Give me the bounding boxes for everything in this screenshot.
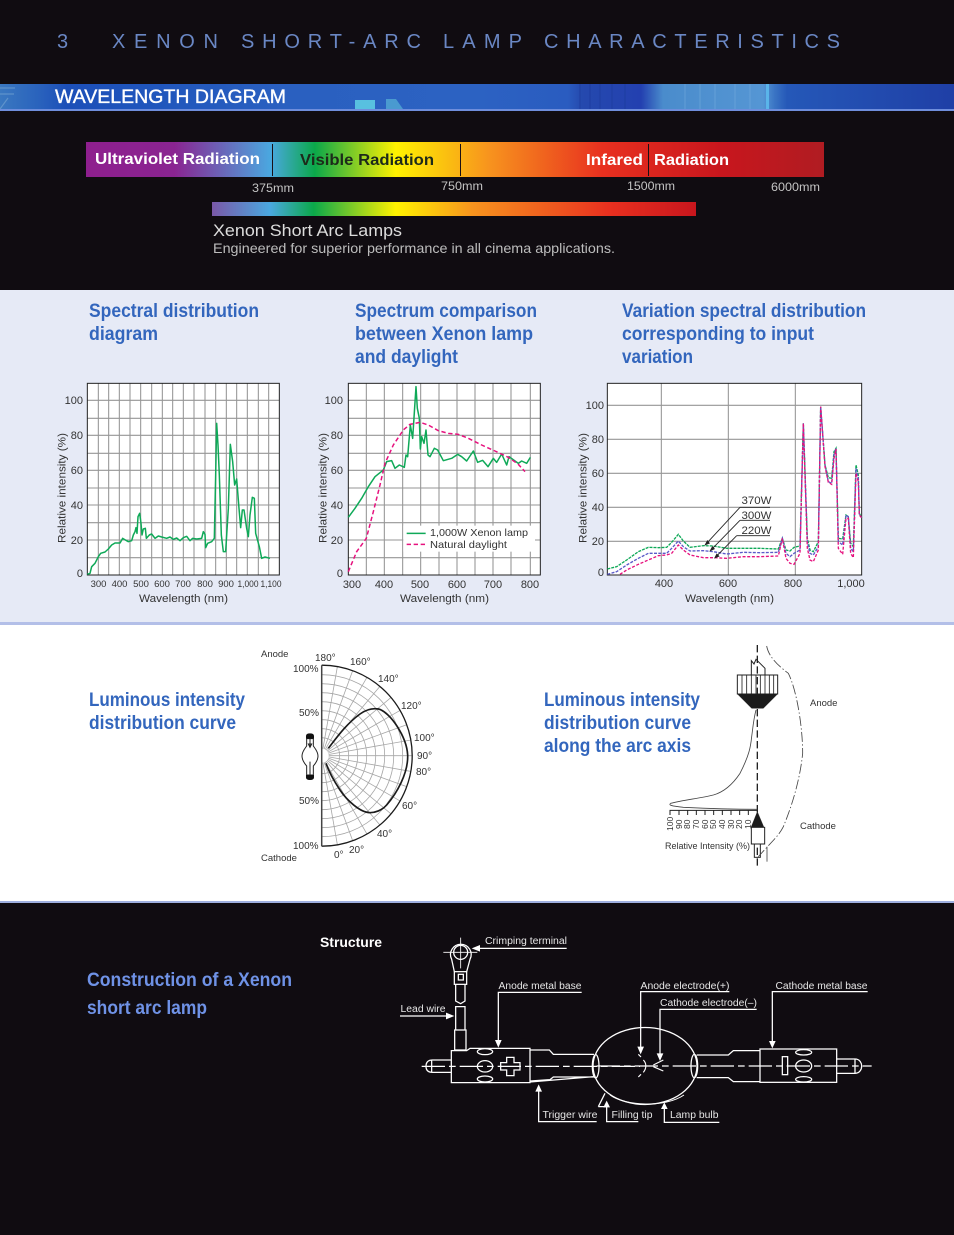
structure diagram: anode side (400, 936, 653, 1122)
polar chart: luminous intensity: 120° (401, 701, 422, 712)
chart: variation spectral distribution: 1,000 (837, 578, 865, 590)
chart: variation spectral distribution: 800 (784, 578, 802, 590)
arc axis diagram: 60 (700, 819, 710, 829)
structure diagram: anode side: Trigger wire (542, 1110, 598, 1121)
xenon lamp caption (213, 221, 615, 256)
chart: spectral distribution: 1,100 (260, 579, 282, 590)
polar chart: luminous intensity: 80° (416, 767, 431, 778)
polar chart: luminous intensity: 160° (350, 657, 371, 668)
chart: variation spectral distribution: 0 (598, 567, 604, 579)
structure diagram: cathode side: Lamp bulb (670, 1110, 719, 1121)
chart: spectral distribution: 400 (112, 579, 127, 590)
chart: variation spectral distribution: 600 (719, 578, 737, 590)
page number and title (57, 31, 840, 53)
chart: spectral distribution: 900 (218, 579, 234, 590)
chart: spectrum comparison: 1,000W Xenon lamp (430, 527, 528, 539)
arc axis diagram: Cathode (800, 821, 836, 832)
chart: spectral distribution: 20 (71, 535, 83, 547)
polar chart: luminous intensity: 60° (402, 801, 417, 812)
chart: spectrum comparison: 500 (411, 579, 429, 591)
polar chart: luminous intensity: 180° (315, 653, 336, 664)
wavelength spectrum bar: Radiation (654, 152, 729, 169)
structure diagram: cathode side (597, 981, 872, 1122)
heading: variation spectral distribution: variation (622, 346, 693, 368)
arc axis diagram: 80 (682, 819, 692, 829)
chart: spectrum comparison: 60 (331, 465, 343, 477)
chart: variation spectral distribution: 300W (742, 510, 772, 522)
chart: spectrum comparison: Wavelength (nm) (400, 593, 489, 605)
chart: spectral distribution: 60 (71, 465, 83, 477)
chart: spectral distribution: 500 (133, 579, 149, 590)
wavelength spectrum bar (86, 142, 824, 177)
arc axis diagram: 40 (717, 819, 727, 829)
chart: spectrum comparison: 0 (337, 568, 343, 580)
chart: variation spectral distribution: 370W (742, 495, 772, 507)
chart: variation spectral distribution: 20 (592, 536, 604, 548)
polar chart: luminous intensity: 100% (293, 841, 319, 852)
chart: variation spectral distribution (578, 383, 865, 605)
polar chart: luminous intensity: 140° (378, 674, 399, 685)
chart: spectral distribution: 40 (71, 500, 83, 512)
structure diagram: cathode side: Anode electrode(+) (640, 981, 730, 992)
chart: spectral distribution: Relative intensity (%) (56, 433, 68, 543)
chart: spectral distribution: 300 (91, 579, 106, 590)
chart: spectrum comparison: Natural daylight (430, 539, 507, 551)
structure diagram: lamp bulb (593, 1028, 697, 1104)
polar chart: luminous intensity: 100° (414, 733, 435, 744)
chart: spectrum comparison: 100 (325, 395, 343, 407)
section banner: wavelength diagram (0, 84, 954, 111)
chart: spectral distribution: 800 (197, 579, 213, 590)
arc axis diagram (665, 645, 837, 867)
heading: luminous intensity along arc axis: distribution curve (544, 712, 691, 734)
panel: luminous intensity (0, 625, 954, 901)
arc axis diagram: Relative Intensity (%) (665, 841, 750, 851)
xenon lamp spectrum bar (212, 202, 696, 216)
chart: variation spectral distribution: 40 (592, 502, 604, 514)
polar chart: luminous intensity: 50% (299, 796, 319, 807)
chart: spectral distribution (56, 383, 282, 605)
arc axis diagram: 30 (726, 819, 736, 829)
chart: variation spectral distribution: 400 (655, 578, 673, 590)
chart: spectral distribution: 100 (65, 395, 83, 407)
chart: variation spectral distribution: 60 (592, 468, 604, 480)
chart: spectral distribution: 700 (175, 579, 191, 590)
heading: variation spectral distribution: corresponding to input (622, 323, 814, 345)
page number and title: 3 (57, 31, 68, 53)
polar chart: luminous intensity: 0° (334, 850, 344, 861)
wavelength tick labels: 1500mm (627, 179, 675, 193)
wavelength tick labels: 375mm (252, 181, 294, 195)
chart: spectrum comparison: 700 (484, 579, 502, 591)
heading: construction of a xenon short arc lamp: short arc lamp (87, 997, 207, 1019)
wavelength tick labels: 6000mm (771, 180, 820, 194)
page number and title: LAMP (443, 31, 522, 53)
heading: luminous intensity along arc axis (544, 689, 700, 757)
chart: spectrum comparison: 300 (343, 579, 361, 591)
polar chart: luminous intensity: 40° (377, 829, 392, 840)
heading: luminous intensity distribution curve: Luminous intensity (89, 689, 245, 711)
xenon lamp caption: Xenon Short Arc Lamps (213, 221, 402, 240)
xenon lamp caption: Engineered for superior performance in all cinema applications. (213, 240, 615, 256)
heading: luminous intensity along arc axis: Luminous intensity (544, 689, 700, 711)
heading: luminous intensity distribution curve: distribution curve (89, 712, 236, 734)
chart: spectrum comparison: 20 (331, 535, 343, 547)
heading: construction of a xenon short arc lamp: Construction of a Xenon (87, 969, 292, 991)
heading: spectrum comparison (355, 300, 537, 368)
heading: spectral distribution diagram: Spectral distribution (89, 300, 259, 322)
chart: spectral distribution: 600 (154, 579, 170, 590)
arc axis diagram: 100 (665, 817, 675, 831)
structure diagram: cathode side: Cathode metal base (776, 981, 868, 992)
heading: variation spectral distribution (622, 300, 866, 368)
wavelength spectrum bar: Visible Radiation (300, 152, 434, 169)
chart: spectral distribution: Wavelength (nm) (139, 593, 228, 605)
heading: spectrum comparison: Spectrum comparison (355, 300, 537, 322)
heading: spectrum comparison: between Xenon lamp (355, 323, 533, 345)
polar chart: luminous intensity: 100% (293, 664, 319, 675)
polar chart: luminous intensity: Cathode (261, 853, 297, 864)
chart: spectrum comparison (318, 383, 540, 605)
arc axis diagram: 50 (708, 819, 718, 829)
page number and title: SHORT-ARC (241, 31, 421, 53)
wavelength tick labels (252, 179, 820, 195)
chart: spectrum comparison: Relative intensity (%) (318, 433, 330, 543)
chart: spectral distribution: 1,000 (238, 579, 258, 590)
structure heading: Structure (320, 934, 382, 950)
chart: variation spectral distribution: 100 (586, 400, 604, 412)
arc axis diagram: Anode (810, 698, 837, 709)
section banner: wavelength diagram: WAVELENGTH DIAGRAM (55, 87, 286, 108)
heading: construction of a xenon short arc lamp (87, 969, 292, 1019)
wavelength spectrum bar: Infared (586, 152, 643, 169)
arc axis diagram: 20 (734, 819, 744, 829)
chart: variation spectral distribution: Relative intensity (%) (578, 433, 590, 543)
wavelength spectrum bar: Ultraviolet Radiation (95, 151, 260, 168)
heading: luminous intensity along arc axis: along the arc axis (544, 735, 691, 757)
chart: variation spectral distribution: 80 (592, 434, 604, 446)
structure diagram: anode side: Filling tip (612, 1110, 653, 1121)
arc axis diagram: 70 (691, 819, 701, 829)
page number and title: XENON (112, 31, 218, 53)
polar chart: luminous intensity: 90° (417, 751, 432, 762)
polar chart: luminous intensity: Anode (261, 649, 288, 660)
chart: spectrum comparison: 80 (331, 430, 343, 442)
chart: spectrum comparison: 800 (521, 579, 539, 591)
arc axis diagram: 90 (674, 819, 684, 829)
structure diagram: anode side: Anode metal base (498, 981, 582, 992)
wavelength tick labels: 750mm (441, 179, 483, 193)
chart: spectrum comparison: 40 (331, 500, 343, 512)
chart: spectrum comparison: 400 (375, 579, 393, 591)
arc axis diagram: 10 (743, 819, 753, 829)
polar chart: luminous intensity (261, 650, 434, 861)
chart: variation spectral distribution: 220W (742, 525, 772, 537)
chart: spectrum comparison: 600 (448, 579, 466, 591)
heading: luminous intensity distribution curve (89, 689, 245, 734)
structure diagram: cathode side: Cathode electrode(–) (660, 998, 757, 1009)
chart: variation spectral distribution: Wavelength (nm) (685, 593, 774, 605)
heading: spectral distribution diagram (89, 300, 259, 345)
heading: variation spectral distribution: Variation spectral distribution (622, 300, 866, 322)
heading: spectral distribution diagram: diagram (89, 323, 158, 345)
structure diagram: anode side: Lead wire (400, 1004, 446, 1015)
structure diagram: anode side: Crimping terminal (485, 936, 567, 947)
chart: spectral distribution: 0 (77, 568, 83, 580)
heading: spectrum comparison: and daylight (355, 346, 458, 368)
panel: spectral charts (0, 290, 954, 622)
polar chart: luminous intensity: 20° (349, 845, 364, 856)
polar chart: luminous intensity: 50% (299, 708, 319, 719)
page number and title: CHARACTERISTICS (544, 31, 840, 53)
chart: spectral distribution: 80 (71, 430, 83, 442)
